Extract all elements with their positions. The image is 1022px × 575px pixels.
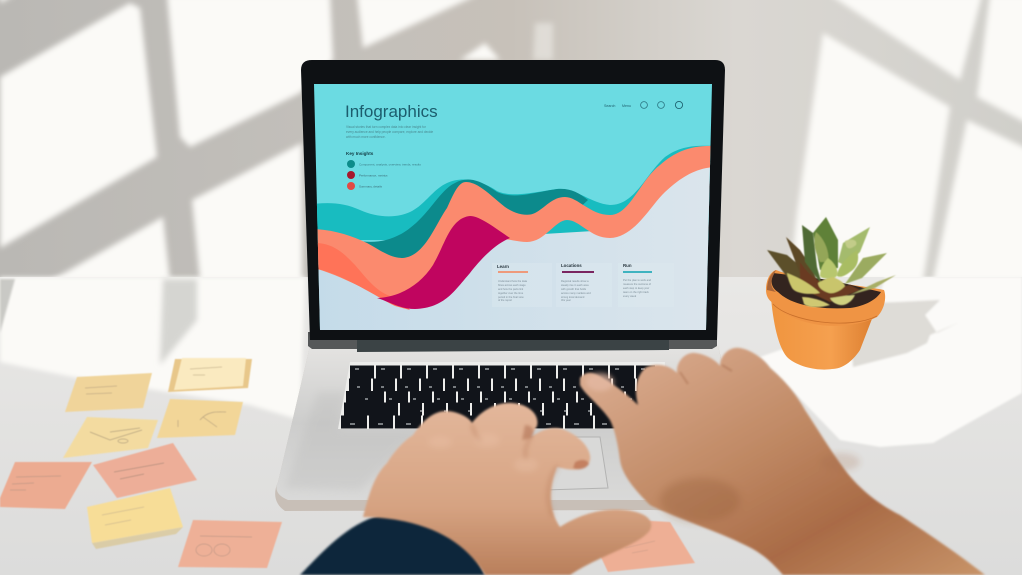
wave: peach — [314, 146, 715, 298]
card 3 — [623, 264, 652, 298]
note: yellow 5 — [87, 488, 183, 549]
card 2: strong local demand — [561, 295, 585, 299]
title: Infographics — [345, 102, 438, 121]
note: pink 1 — [0, 462, 92, 509]
nav links and icons: Search — [604, 104, 615, 108]
legend: Performance, metrics — [359, 174, 388, 178]
description: with much more confidence. — [346, 135, 386, 139]
card 2: Locations — [561, 263, 582, 268]
screen — [310, 80, 720, 332]
laptop — [275, 60, 760, 512]
card 1: and how the parts link — [498, 287, 524, 291]
card 3: team on the right track — [623, 290, 650, 294]
wave: magenta — [377, 216, 510, 309]
legend — [346, 151, 421, 190]
note: pink under hand — [582, 517, 695, 572]
note: yellow 4 — [63, 417, 158, 458]
nav links and icons: Menu — [622, 104, 631, 108]
legend: Component, analysis, overview, trends, results — [359, 162, 421, 166]
card 1: of the report — [498, 298, 512, 302]
legend: Key Insights — [346, 151, 374, 156]
card 3: Put the plan to work and — [623, 278, 652, 282]
desk — [0, 277, 1022, 575]
laptop base — [275, 346, 760, 512]
card 2: this year — [561, 298, 571, 302]
description: every audience and help people compare, explore and decide — [346, 130, 433, 134]
lower light background — [314, 160, 715, 332]
description — [346, 126, 433, 138]
card 1: period in the final view — [498, 295, 524, 299]
note: yellow 1 — [65, 373, 152, 412]
note: pink 3 — [178, 520, 282, 568]
card 2: with growth that holds — [561, 287, 587, 291]
succulent leaves — [767, 217, 896, 307]
wall with window light — [0, 0, 1022, 281]
right hand and forearm — [580, 348, 985, 575]
card 3: measure the outcome of — [623, 282, 651, 286]
note: yellow 2 — [168, 358, 252, 392]
legend: Summary, details — [359, 184, 382, 188]
card 2: Regional results show a — [561, 279, 589, 283]
card 1: Understand how the data — [498, 279, 528, 283]
pot — [766, 270, 885, 370]
card 2: across many markets and — [561, 291, 591, 295]
card 3: every week — [623, 294, 637, 298]
left sleeve — [300, 515, 485, 575]
left hand — [363, 403, 651, 575]
card 1: Learn — [497, 264, 509, 269]
wave: coral — [314, 243, 410, 310]
wave: light teal — [313, 146, 715, 240]
note: yellow 3 — [157, 399, 243, 438]
card 2: steady rise in each area — [561, 283, 589, 287]
sticky notes — [0, 358, 695, 572]
plant shadow — [850, 300, 960, 367]
plant in pot — [766, 217, 896, 370]
card 1 — [497, 265, 528, 302]
description: Visual stories that turn complex data into clear insight for — [346, 125, 427, 129]
card 1: together over the time — [498, 291, 524, 295]
hinge — [308, 332, 717, 352]
nav links and icons — [604, 101, 683, 109]
card 3: each step to keep your — [623, 286, 649, 290]
card 1: flows across each stage — [498, 283, 526, 287]
trackpad — [517, 437, 608, 490]
wave: dark teal — [355, 180, 588, 262]
note: pink 2 — [93, 443, 197, 498]
screen bezel — [301, 60, 725, 340]
card 2 — [561, 264, 594, 302]
keyboard — [338, 362, 665, 429]
card 3: Run — [623, 263, 632, 268]
